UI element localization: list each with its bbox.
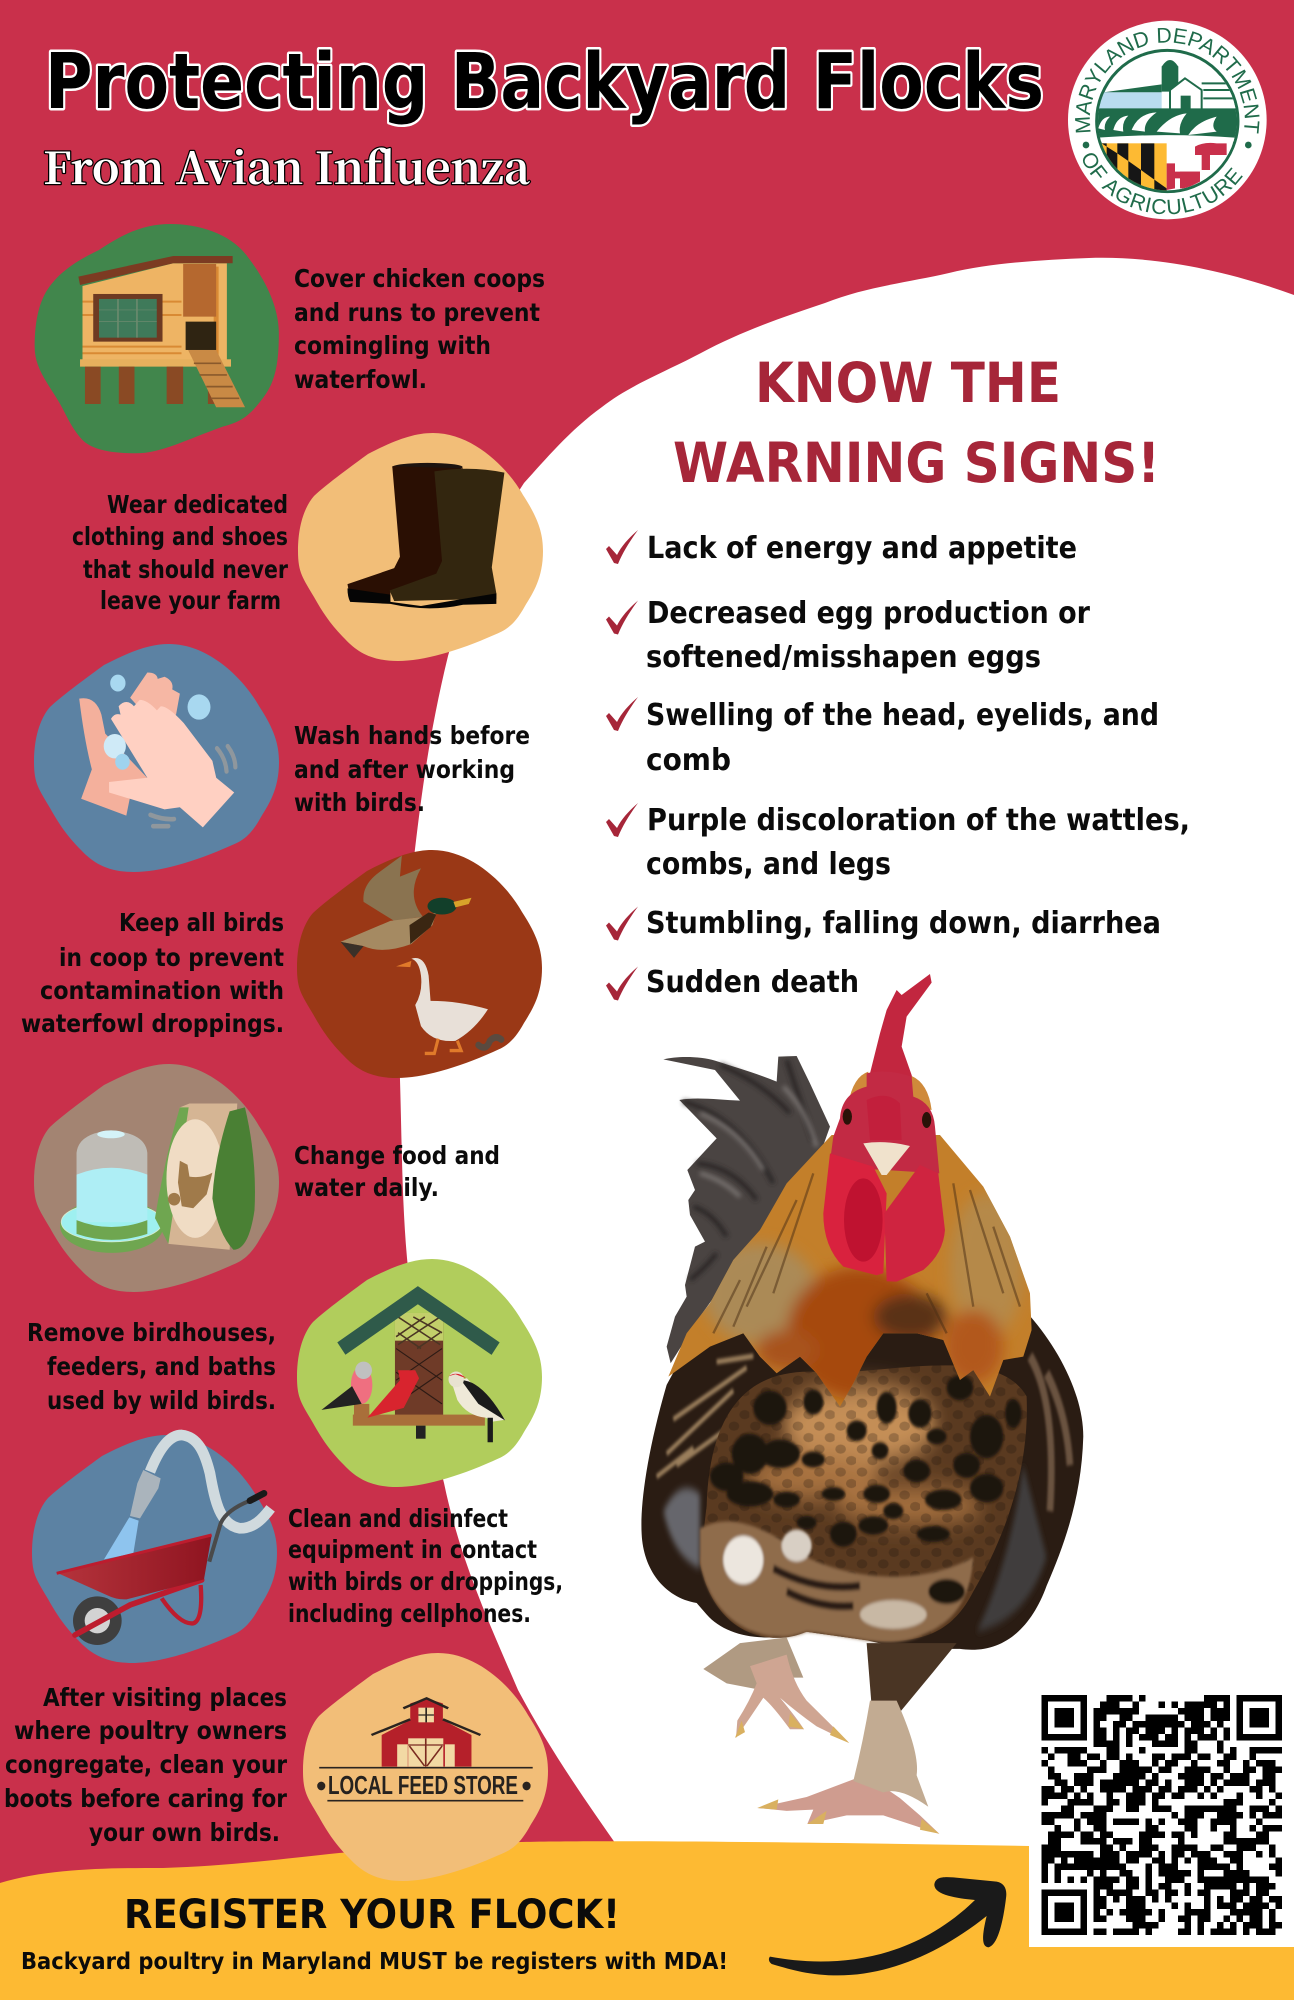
icon: tan blob with local feed store barn [303, 1653, 548, 1881]
icon: tan blob with local feed store barn: LOCAL FEED STORE [328, 1770, 518, 1800]
text: clean boots: where poultry owners [14, 1716, 287, 1745]
panel: wash hands [34, 644, 530, 872]
text: wash hands: and after working [294, 755, 515, 784]
text: dedicated clothing: Wear dedicated [107, 490, 288, 519]
title: Protecting Backyard Flocks [45, 38, 1044, 127]
text: keep birds in coop [21, 908, 284, 1038]
item: decreased egg production: Decreased egg production or [647, 596, 1090, 631]
text: clean boots: your own birds. [89, 1818, 280, 1847]
rooster head, comb and wattles [823, 974, 945, 1282]
icon: green blob with chicken coop [35, 224, 279, 453]
icon: blue blob with washing hands [34, 644, 279, 872]
panel: dedicated clothing [72, 433, 543, 661]
text: clean equipment [288, 1504, 563, 1628]
subtitle: From Avian Influenza [43, 133, 530, 197]
QR code [1042, 1698, 1282, 1932]
item: stumbling: Stumbling, falling down, diarrhea [646, 906, 1161, 941]
rooster tail feathers [663, 1056, 830, 1363]
rooster body and wings [641, 1138, 1083, 1834]
panel: clean equipment [32, 1435, 563, 1663]
white curved panel [400, 258, 1294, 1950]
text: clean boots: boots before caring for [4, 1784, 288, 1813]
panel: remove birdhouses [27, 1259, 542, 1487]
text: dedicated clothing: leave your farm [100, 586, 281, 615]
text: change food and water [294, 1141, 500, 1202]
text: cover coops: and runs to prevent [294, 298, 540, 327]
heading: know the warning signs: KNOW THE [755, 351, 1061, 415]
heading: know the warning signs: WARNING SIGNS! [673, 431, 1160, 495]
item: swelling: Swelling of the head, eyelids, and [646, 698, 1159, 733]
icon: check mark 1 [606, 530, 638, 564]
icon: blue blob with wheelbarrow and hose [32, 1435, 277, 1663]
text: remove birdhouses [27, 1318, 276, 1415]
text: remove birdhouses: feeders, and baths [47, 1352, 276, 1381]
text: register heading: REGISTER YOUR FLOCK! [124, 1892, 620, 1938]
item: purple discoloration: combs, and legs [646, 847, 891, 882]
text: wash hands: with birds. [294, 788, 425, 817]
icon: brown blob with duck and goose [297, 850, 542, 1078]
item: purple discoloration: Purple discoloration of the wattles, [647, 803, 1190, 838]
right leg and foot [867, 1643, 957, 1712]
heading: know the warning signs [673, 351, 1160, 495]
text: keep birds in coop: waterfowl droppings. [21, 1009, 284, 1038]
icon: check mark 6 [606, 966, 638, 1000]
item: sudden death: Sudden death [646, 965, 859, 1000]
text: remove birdhouses: Remove birdhouses, [27, 1318, 276, 1347]
item: swelling: comb [646, 743, 731, 778]
icon: tan blob with boots [298, 433, 543, 661]
text: clean boots: congregate, clean your [5, 1750, 288, 1779]
logo: Maryland Department of Agriculture seal: MARYLAND DEPARTMENT [1075, 28, 1260, 134]
yellow register band [0, 1841, 1294, 2000]
panel: change food and water [34, 1064, 500, 1292]
logo: Maryland Department of Agriculture seal [1068, 20, 1267, 220]
text: remove birdhouses: used by wild birds. [47, 1386, 276, 1415]
text: keep birds in coop: contamination with [40, 976, 284, 1005]
text: register note: Backyard poultry in Maryland MUST be registers with MDA! [21, 1947, 728, 1975]
icon: lime blob with bird feeder [297, 1259, 542, 1487]
text: cover coops [294, 264, 545, 394]
text: cover coops: comingling with [294, 331, 491, 360]
item: lack of energy: Lack of energy and appetite [647, 531, 1077, 566]
text: dedicated clothing: that should never [83, 555, 289, 584]
text: dedicated clothing [72, 490, 289, 615]
logo: Maryland Department of Agriculture seal: OF AGRICULTURE [1082, 153, 1243, 214]
icon: check mark 5 [606, 906, 638, 940]
checklist: warning signs [606, 530, 1190, 1000]
icon: taupe blob with waterer and feed bag [34, 1064, 279, 1292]
rooster neck hackle [660, 1127, 1040, 1413]
text: clean equipment: including cellphones. [288, 1599, 531, 1628]
text: cover coops: waterfowl. [294, 365, 427, 394]
chest feathers [700, 1365, 1027, 1641]
text: clean equipment: Clean and disinfect [288, 1504, 508, 1533]
text: clean equipment: with birds or droppings, [288, 1567, 563, 1596]
text: cover coops: Cover chicken coops [294, 264, 545, 293]
left foot [703, 1637, 803, 1689]
text: change food and water: water daily. [294, 1173, 439, 1202]
panel: cover coops [35, 224, 545, 453]
text: wash hands: Wash hands before [294, 721, 530, 750]
lower belly [700, 1521, 973, 1642]
panel: clean boots after visiting [4, 1653, 548, 1881]
text: dedicated clothing: clothing and shoes [72, 522, 288, 551]
icon: check mark 3 [606, 697, 638, 731]
illustration: rooster [641, 974, 1083, 1834]
text: clean boots: After visiting places [43, 1683, 287, 1712]
panel: keep birds in coop [21, 850, 542, 1078]
item: decreased egg production: softened/misshapen eggs [646, 640, 1041, 675]
text: keep birds in coop: Keep all birds [119, 908, 284, 937]
item: swelling [646, 698, 1159, 778]
text: wash hands [294, 721, 530, 817]
arrow pointing to QR code [769, 1877, 1006, 1975]
text: change food and water: Change food and [294, 1141, 500, 1170]
item: decreased egg production [646, 596, 1090, 675]
item: purple discoloration [646, 803, 1190, 882]
text: clean equipment: equipment in contact [288, 1535, 537, 1564]
icon: check mark 4 [606, 803, 638, 837]
text: keep birds in coop: in coop to prevent [59, 943, 284, 972]
text: clean boots [4, 1683, 288, 1847]
icon: check mark 2 [606, 600, 638, 634]
